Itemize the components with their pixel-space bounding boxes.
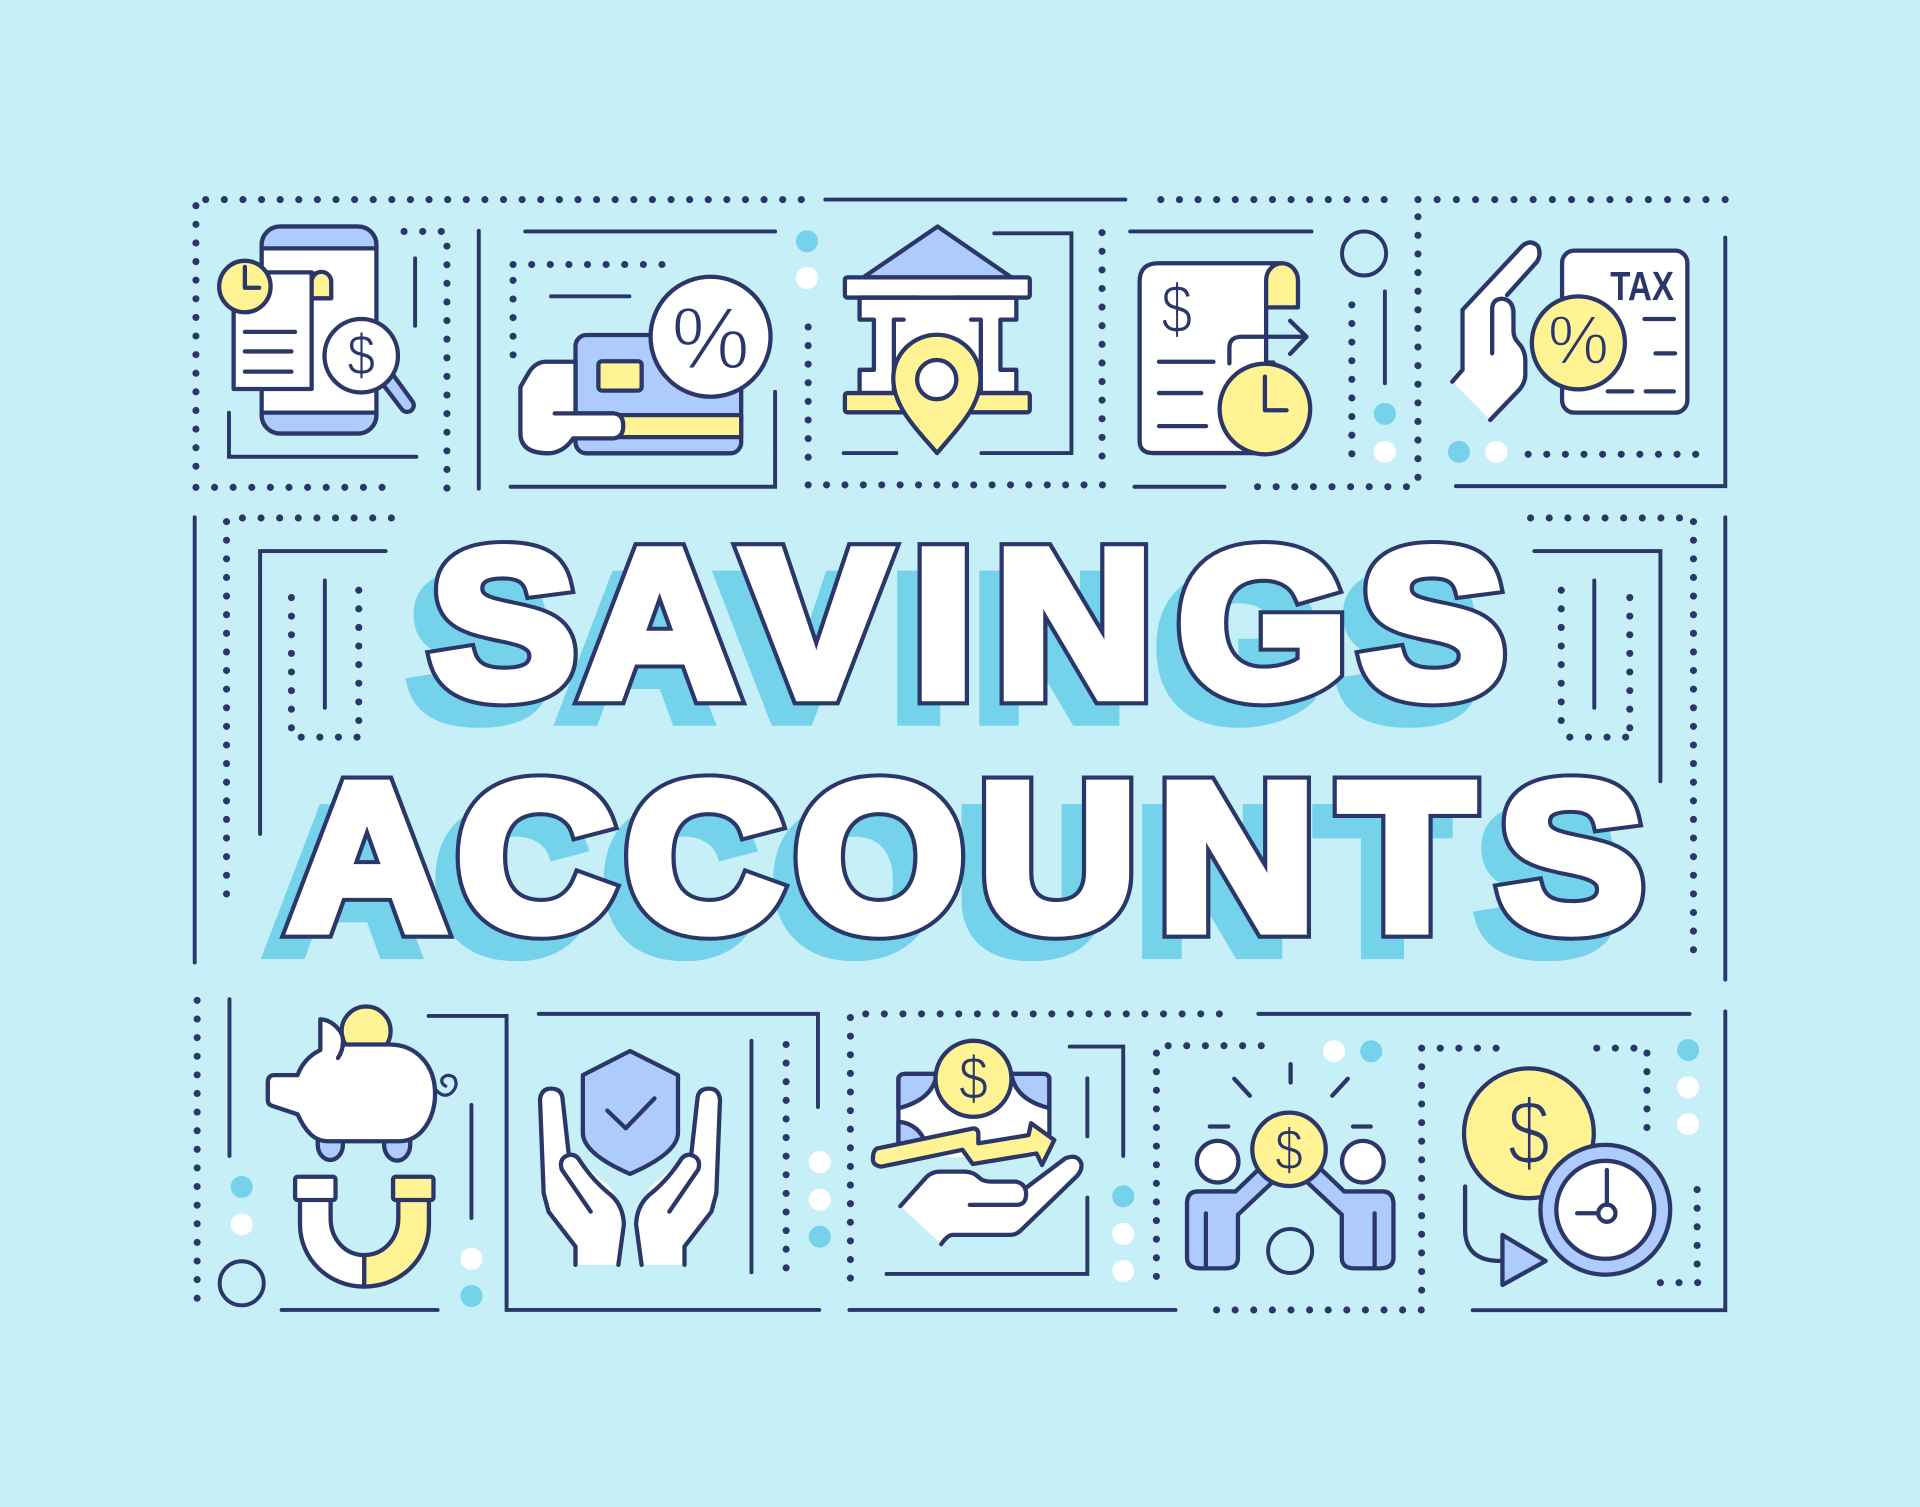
icon: bank building with location pin xyxy=(845,227,1030,453)
icon: two people raising a coin xyxy=(1187,1064,1393,1268)
icon: scroll statement with clock and arrow xyxy=(1140,263,1310,454)
icon: horseshoe magnet xyxy=(295,1177,433,1287)
title outline: SAVINGS xyxy=(430,507,1506,741)
icon: coin, clock and play arrow: $ xyxy=(1508,1081,1550,1185)
title: SAVINGS ACCOUNTS xyxy=(264,507,1644,999)
decorative frame: lines, dotted lines xyxy=(195,200,1729,1310)
icon: credit card with percent badge xyxy=(520,277,771,453)
icon: phone with statement and magnifier xyxy=(219,227,414,433)
icon: piggy bank with coin xyxy=(268,1007,456,1161)
title white fill: SAVINGS xyxy=(430,507,1506,741)
title outline: ACCOUNTS xyxy=(288,740,1644,974)
title shadow: SAVINGS xyxy=(406,532,1481,765)
decorative dots and rings xyxy=(220,230,1699,1307)
icon: banknote, growth arrow and open hand: $ xyxy=(959,1046,988,1114)
icon: banknote, growth arrow and open hand xyxy=(873,1041,1081,1244)
icon: hand protecting tax document: TAX xyxy=(1610,263,1674,309)
title white fill: ACCOUNTS xyxy=(288,740,1644,974)
title shadow xyxy=(264,532,1620,999)
icon: coin, clock and play arrow xyxy=(1464,1068,1670,1285)
icon: hands holding shield with check xyxy=(540,1051,720,1265)
icon: hand protecting tax document: % xyxy=(1548,302,1609,379)
icon: phone with statement and magnifier: $ xyxy=(347,323,375,388)
title outline xyxy=(288,507,1644,974)
icon: hand protecting tax document xyxy=(1452,242,1687,420)
icon: scroll statement with clock and arrow: $ xyxy=(1161,271,1192,349)
icon: credit card with percent badge: % xyxy=(671,289,750,388)
title shadow: ACCOUNTS xyxy=(264,765,1620,999)
title white fill xyxy=(288,507,1644,974)
icon: two people raising a coin: $ xyxy=(1275,1117,1303,1182)
